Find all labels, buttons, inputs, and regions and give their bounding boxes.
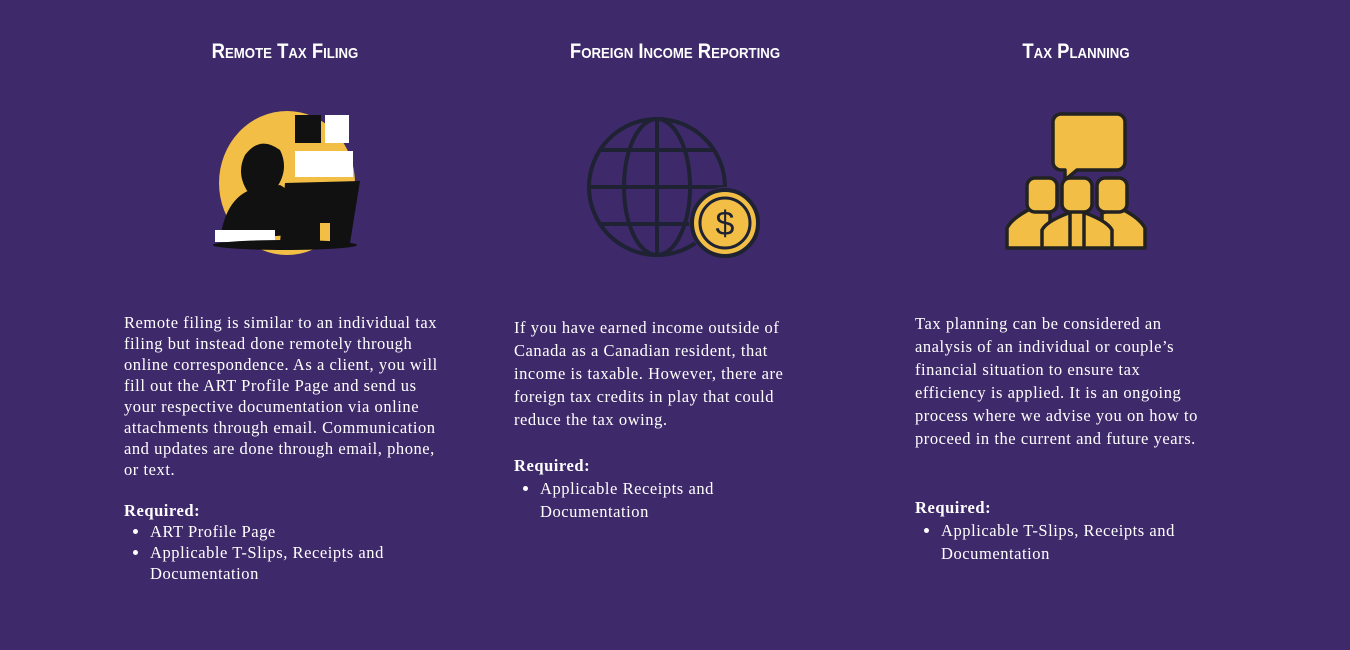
text block: tax planning: analysis of an individual or couple’s [915,337,1174,356]
required list: remote filing: ART Profile Page [150,522,276,541]
text block: remote filing: your respective documentation via online [124,397,419,416]
text block: tax planning: efficiency is applied. It is an ongoing [915,383,1181,402]
text block: remote filing: fill out the ART Profile Page and send us [124,376,417,395]
required list: tax planning: Documentation [941,544,1050,563]
text block: foreign income: income is taxable. However, there are [514,364,783,383]
text block: remote filing: and updates are done through email, phone, [124,439,435,458]
required list: foreign income: Required: [514,456,590,475]
text block: remote filing [124,313,438,479]
text block: tax planning: financial situation to ensure tax [915,360,1140,379]
text block: remote filing: attachments through email. Communication [124,418,436,437]
text block: foreign income: If you have earned income outside of [514,318,779,337]
text block: tax planning: Tax planning can be considered an [915,314,1162,333]
title: tax planning: Tax Planning [1022,40,1130,63]
text block: remote filing: filing but instead done remotely through [124,334,412,353]
required list: tax planning: Applicable T-Slips, Receipts and [941,521,1175,540]
text block: foreign income: Canada as a Canadian resident, that [514,341,768,360]
text block: remote filing: or text. [124,460,175,479]
text block: remote filing: online correspondence. As a client, you will [124,355,438,374]
required list: foreign income [514,456,714,521]
title: foreign income reporting: Foreign Income Reporting [570,40,780,63]
text block: tax planning [915,314,1198,448]
required list: remote filing: Required: [124,501,200,520]
required list: tax planning [915,498,1175,563]
text block: foreign income [514,318,783,429]
required list: remote filing [124,501,384,583]
text block: tax planning: process where we advise you on how to [915,406,1198,425]
icon: globe with dollar coin: $ [716,205,735,243]
icon: woman at computer [213,111,360,255]
required list: foreign income: Applicable Receipts and [540,479,714,498]
text block: tax planning: proceed in the current and future years. [915,429,1196,448]
text block: remote filing: Remote filing is similar to an individual tax [124,313,437,332]
text block: foreign income: reduce the tax owing. [514,410,668,429]
title: remote tax filing: Remote Tax Filing [212,40,358,63]
required list: foreign income: Documentation [540,502,649,521]
required list: tax planning: Required: [915,498,991,517]
required list: remote filing: Documentation [150,564,259,583]
icon: globe with dollar coin [587,117,760,258]
required list: remote filing: Applicable T-Slips, Receipts and [150,543,384,562]
text block: foreign income: foreign tax credits in play that could [514,387,774,406]
icon: group with speech bubble [1005,112,1147,250]
